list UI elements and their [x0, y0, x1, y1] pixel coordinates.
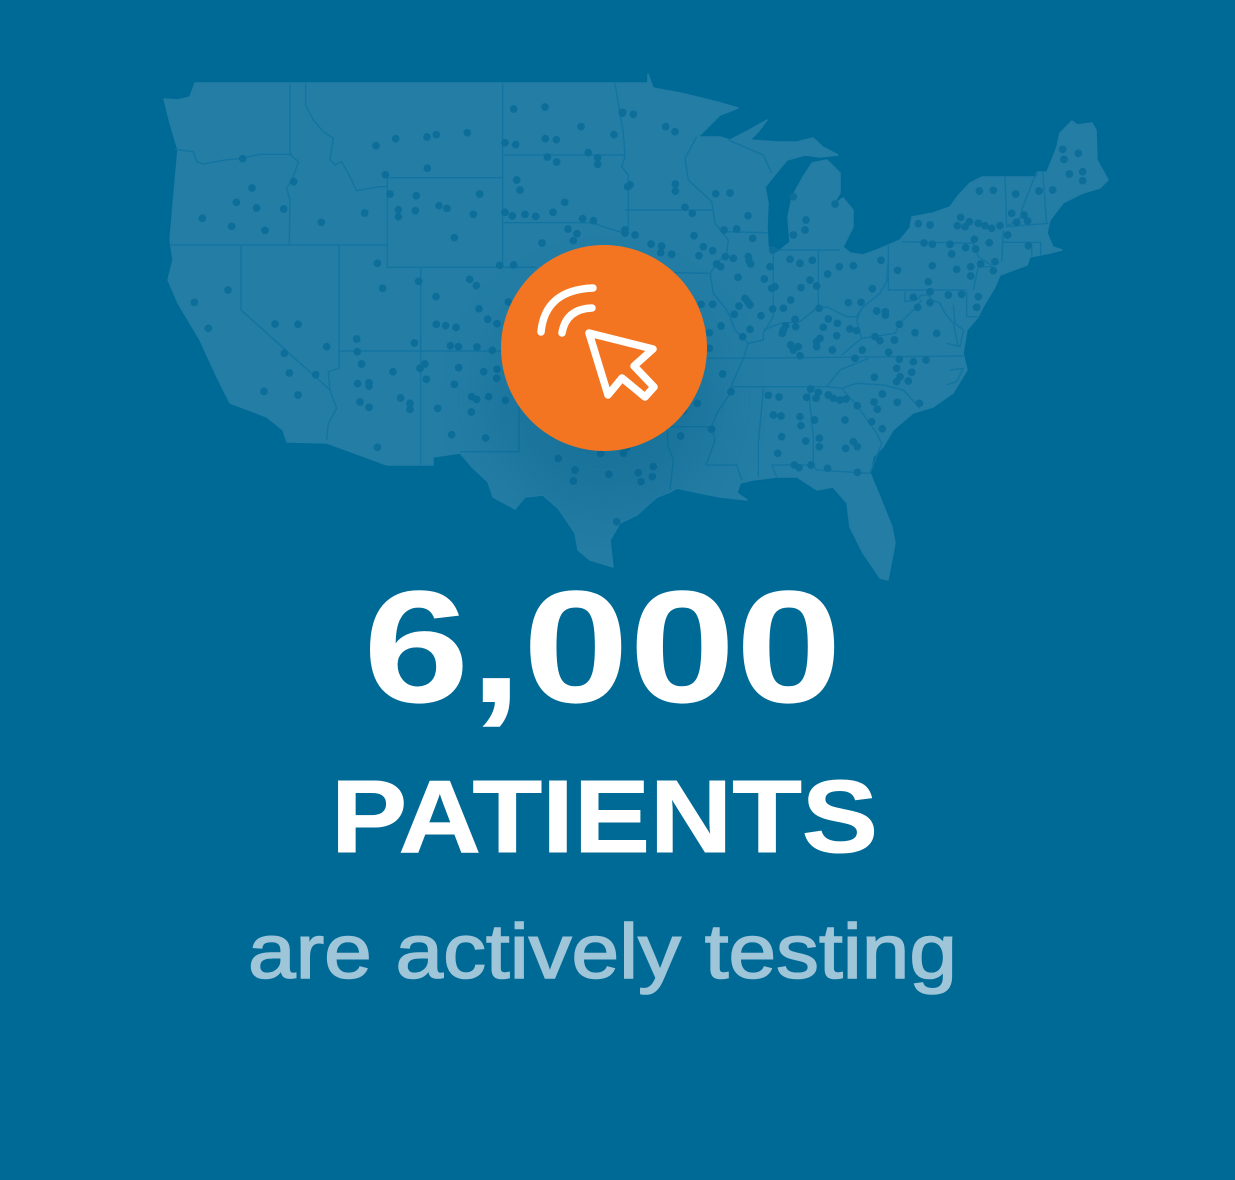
heading: patients: PATIENTS	[331, 759, 878, 874]
caption: are actively testing	[248, 909, 957, 995]
map landmass	[164, 74, 1108, 580]
orange badge	[501, 245, 707, 451]
icon: orange circle with cursor	[501, 245, 707, 451]
state borders west	[171, 83, 628, 465]
icon: signal arcs	[541, 288, 593, 333]
US map	[164, 74, 1108, 580]
clinic dots west	[190, 103, 631, 525]
state borders east	[620, 137, 1048, 490]
icon: cursor arrow	[589, 333, 654, 397]
stat number: 6,000	[363, 557, 842, 736]
circle shadow on map	[520, 407, 689, 485]
clinic dots east	[619, 108, 1086, 485]
